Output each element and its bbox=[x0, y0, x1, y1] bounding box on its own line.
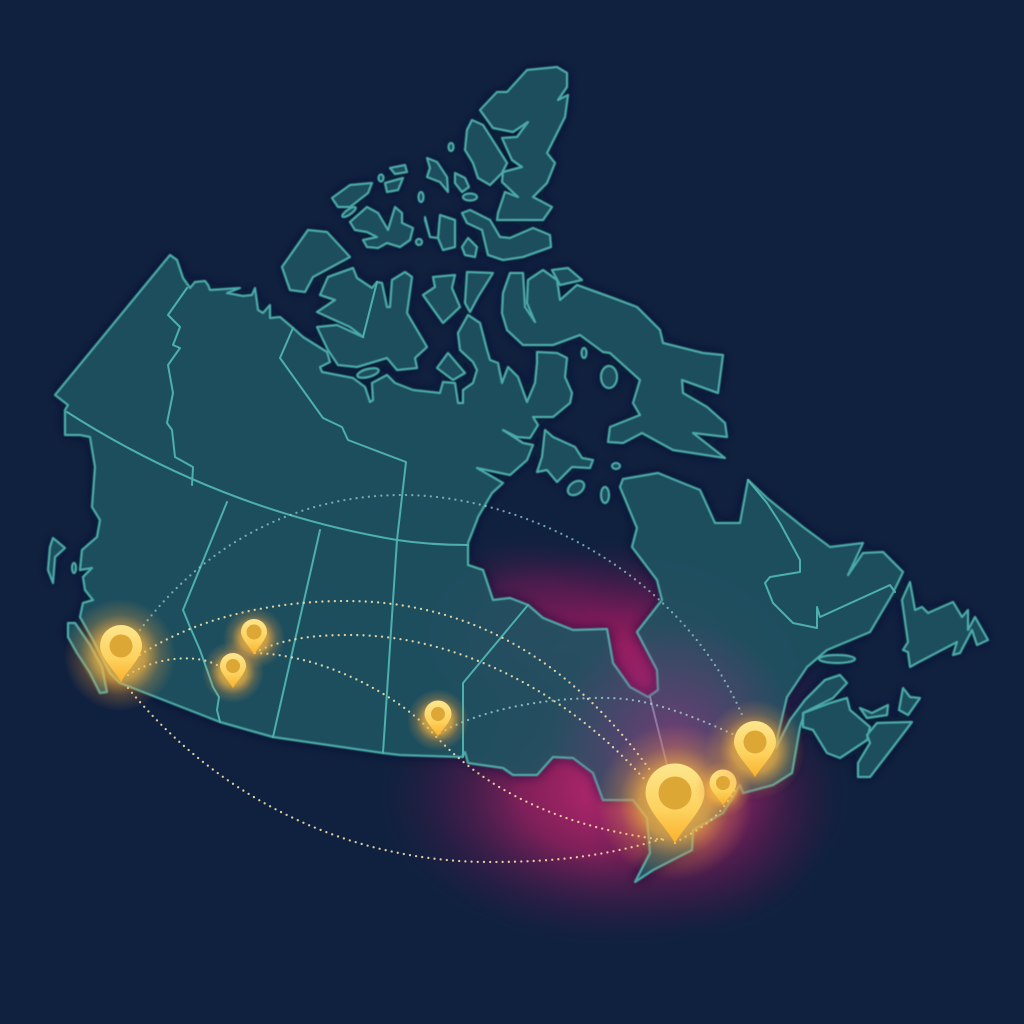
glow: over Ontario and Quebec land bbox=[550, 620, 800, 870]
route: Ontario to Ottawa bbox=[675, 790, 735, 843]
map: Canada landmass bbox=[48, 67, 988, 882]
pin: Montreal bbox=[705, 700, 805, 800]
island: Devon bbox=[462, 210, 551, 260]
provincial borders bbox=[67, 282, 895, 765]
region: mainland bbox=[55, 255, 903, 882]
pin: Vancouver bbox=[64, 599, 176, 711]
pin: Calgary bbox=[202, 641, 264, 703]
island: Anticosti bbox=[819, 655, 855, 663]
border: British Columbia and Alberta bbox=[183, 502, 227, 722]
region: New Brunswick bbox=[803, 698, 870, 758]
route: Alberta through Manitoba to Ontario bbox=[255, 653, 665, 840]
border: Alberta and Saskatchewan bbox=[273, 530, 320, 737]
region: Prince Edward Island bbox=[860, 705, 888, 718]
island: Victoria bbox=[317, 268, 427, 370]
border: Northwest Territories and Nunavut bbox=[280, 328, 406, 753]
island: coastal islet bbox=[72, 563, 76, 573]
island: Cornwallis bbox=[462, 238, 477, 257]
island: Vancouver bbox=[68, 623, 107, 693]
route: southern arc bbox=[128, 688, 665, 862]
route: Alberta to Ontario bbox=[260, 635, 645, 780]
border: Yukon and Northwest Territories bbox=[167, 288, 193, 485]
island: Meighen bbox=[390, 165, 407, 174]
pin: Ottawa bbox=[695, 761, 751, 817]
border: Quebec and Labrador bbox=[748, 480, 895, 628]
island: Amund Ringnes bbox=[455, 173, 469, 192]
island: Haida Gwaii bbox=[48, 538, 65, 583]
border: Manitoba and Ontario bbox=[463, 605, 528, 757]
island: Southampton bbox=[537, 430, 593, 482]
island: Prince of Wales bbox=[423, 275, 460, 323]
island: Baffin bbox=[502, 270, 727, 458]
island: Ellesmere bbox=[480, 67, 568, 220]
region: Nova Scotia bbox=[858, 722, 912, 777]
island: King William bbox=[437, 353, 465, 380]
island: Newfoundland bbox=[902, 582, 988, 667]
island: Lougheed bbox=[385, 178, 403, 192]
region: Cape Breton bbox=[899, 688, 920, 715]
border: 60th parallel bbox=[67, 412, 468, 545]
route: prairie upper arc bbox=[140, 601, 650, 770]
route: northern arc bbox=[140, 495, 743, 717]
island: Ellef Ringnes bbox=[427, 158, 448, 192]
route: Vancouver to Alberta bbox=[128, 658, 222, 675]
connection routes bbox=[128, 495, 743, 862]
island: Somerset bbox=[465, 272, 493, 312]
pin: Edmonton bbox=[223, 607, 285, 669]
glow: western Hudson Bay bbox=[405, 535, 655, 735]
glow: eastern Great Lakes bbox=[585, 685, 835, 935]
island: Bathurst bbox=[425, 215, 455, 250]
island: Banks bbox=[282, 230, 350, 292]
border: Victoria Island bbox=[363, 282, 377, 337]
island: Melville bbox=[350, 207, 413, 248]
pin: Toronto bbox=[597, 724, 753, 880]
glow: James Bay bbox=[445, 540, 825, 840]
island: Borden bbox=[332, 183, 372, 207]
island: Bylot bbox=[552, 268, 582, 285]
border: Ontario and Quebec bbox=[650, 697, 667, 765]
pin: Winnipeg bbox=[407, 689, 469, 751]
islands: small Arctic ellipses bbox=[341, 143, 620, 503]
glow: southern Ontario bbox=[380, 645, 850, 945]
route: Manitoba to Quebec bbox=[440, 698, 735, 735]
island: Axel Heiberg bbox=[465, 120, 507, 185]
